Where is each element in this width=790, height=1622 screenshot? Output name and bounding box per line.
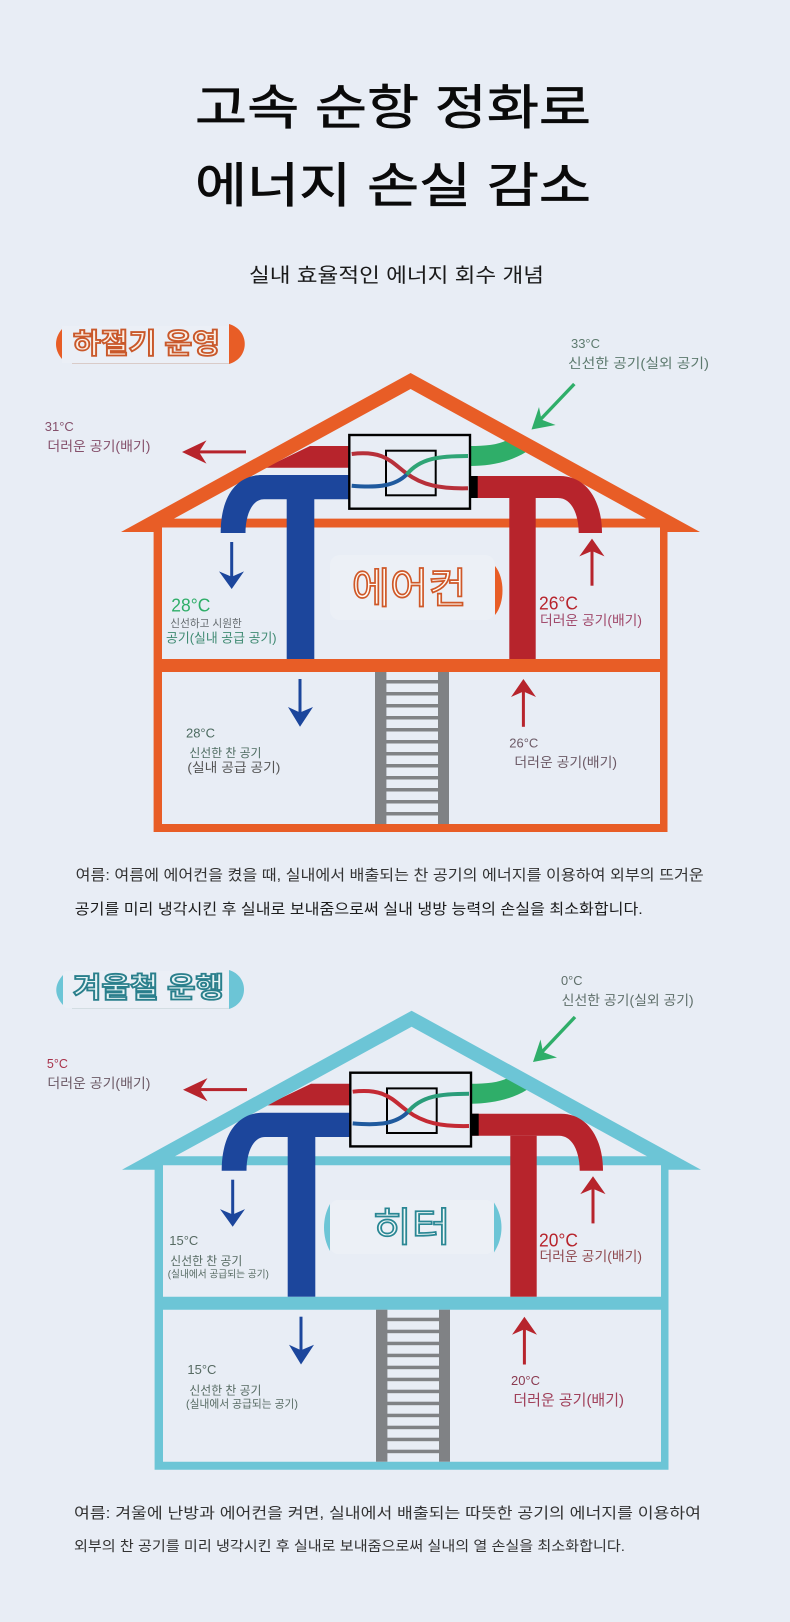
label: upper supply summer: 신선하고 시원한: [170, 616, 242, 630]
text block: winter description: 외부의 찬 공기를 미리 냉각시킨 후 실내로 보내줌으로써 실내의 열 손실을 최소화합니다.: [74, 1538, 625, 1554]
section heading: winter operation: 겨울철 운행: [73, 972, 224, 1003]
title: [195, 82, 591, 213]
label: outdoor fresh air winter: [561, 974, 694, 1008]
label: exhaust air summer: [45, 420, 150, 454]
label: upper return winter: 더러운 공기(배기): [540, 1249, 642, 1264]
return air duct: [471, 1114, 603, 1297]
arrow: supply down lower floor: [288, 679, 313, 727]
label: lower supply winter: [186, 1363, 298, 1410]
label: upper return summer: 26°C: [539, 594, 578, 614]
exhaust duct to outside: [265, 446, 349, 468]
subtitle: 실내 효율적인 에너지 회수 개념: [249, 264, 544, 287]
label: lower supply summer: 28°C: [186, 726, 215, 740]
section heading: winter operation: [56, 970, 244, 1009]
label: lower return summer: 26°C: [509, 736, 538, 750]
arrow: return up lower floor: [511, 679, 536, 727]
label: outdoor fresh air summer: 신선한 공기(실외 공기): [568, 356, 709, 371]
arrow: fresh air in: [533, 1017, 575, 1062]
label: outdoor fresh air summer: 33°C: [571, 337, 600, 351]
heading: air conditioner: 에어컨: [352, 565, 467, 612]
arrow: return up upper floor: [579, 539, 604, 586]
heat exchanger: [350, 1073, 479, 1146]
arrow: supply down lower floor: [289, 1317, 314, 1364]
heading: heater: 히터: [373, 1206, 451, 1250]
return air duct: [470, 476, 602, 659]
label: lower return summer: 더러운 공기(배기): [514, 755, 617, 770]
house outline: [122, 1011, 701, 1470]
fresh air intake duct: [471, 1078, 527, 1104]
supply air duct: [222, 1113, 350, 1297]
title: 에너지 손실 감소: [195, 160, 591, 213]
label: upper supply winter: 15°C: [169, 1234, 198, 1248]
text block: summer description: [75, 867, 704, 918]
arrow: supply down upper floor: [220, 1180, 245, 1227]
title: 고속 순항 정화로: [195, 82, 591, 135]
diagram: summer house: [121, 373, 700, 832]
arrow: fresh air in: [532, 384, 574, 430]
label: upper supply winter: (실내에서 공급되는 공기): [168, 1268, 269, 1280]
heading: heater: [324, 1200, 502, 1254]
label: lower return summer: [509, 736, 617, 770]
text block: winter description: 여름: 겨울에 난방과 에어컨을 켜면, 실내에서 배출되는 따뜻한 공기의 에너지를 이용하여: [74, 1505, 701, 1522]
label: upper supply summer: 28°C: [171, 596, 210, 616]
heat exchanger: [349, 435, 478, 509]
supply air duct: [221, 475, 349, 659]
label: outdoor fresh air winter: 신선한 공기(실외 공기): [562, 993, 694, 1008]
arrow: return up lower floor: [512, 1317, 537, 1364]
label: lower supply summer: 신선한 찬 공기: [189, 745, 261, 760]
label: lower return winter: 더러운 공기(배기): [513, 1392, 624, 1409]
heading: air conditioner: [330, 555, 502, 620]
text block: summer description: 공기를 미리 냉각시킨 후 실내로 보내줌으로써 실내 냉방 능력의 손실을 최소화합니다.: [75, 901, 643, 918]
exhaust duct to outside: [266, 1084, 350, 1105]
label: upper supply summer: [166, 596, 277, 646]
label: lower return winter: 20°C: [511, 1374, 540, 1388]
diagram: winter house: [122, 1011, 701, 1470]
label: outdoor fresh air winter: 0°C: [561, 974, 582, 988]
arrow: exhaust out: [183, 1078, 247, 1101]
section heading: summer operation: 하절기 운영: [73, 328, 220, 359]
label: lower return winter: [511, 1374, 624, 1409]
label: upper supply summer: 공기(실내 공급 공기): [166, 630, 277, 646]
label: lower supply summer: [186, 726, 280, 775]
staircase: [375, 672, 449, 824]
fresh air intake duct: [470, 440, 526, 466]
label: upper return winter: 20°C: [539, 1230, 578, 1250]
label: exhaust air winter: 더러운 공기(배기): [47, 1076, 150, 1091]
label: lower supply summer: (실내 공급 공기): [187, 760, 280, 775]
label: lower supply winter: 신선한 찬 공기: [189, 1382, 261, 1398]
label: exhaust air summer: 더러운 공기(배기): [47, 439, 150, 454]
arrow: return up upper floor: [580, 1176, 606, 1223]
label: upper return summer: [539, 594, 642, 628]
label: lower supply winter: (실내에서 공급되는 공기): [186, 1398, 298, 1410]
text block: winter description: [74, 1505, 701, 1554]
text block: summer description: 여름: 여름에 에어컨을 켰을 때, 실내에서 배출되는 찬 공기의 에너지를 이용하여 외부의 뜨거운: [76, 867, 704, 884]
label: exhaust air summer: 31°C: [45, 420, 74, 434]
label: upper supply winter: 신선한 찬 공기: [170, 1253, 242, 1268]
label: lower supply winter: 15°C: [187, 1363, 216, 1377]
label: upper return summer: 더러운 공기(배기): [540, 613, 642, 628]
label: upper supply winter: [168, 1234, 269, 1280]
house outline: [121, 373, 700, 832]
arrow: supply down upper floor: [219, 542, 244, 589]
label: upper return winter: [539, 1230, 642, 1264]
section heading: summer operation: [56, 324, 245, 364]
arrow: exhaust out: [182, 440, 246, 464]
label: outdoor fresh air summer: [568, 337, 709, 371]
label: exhaust air winter: [47, 1057, 150, 1091]
staircase: [376, 1310, 450, 1462]
label: exhaust air winter: 5°C: [47, 1057, 68, 1071]
